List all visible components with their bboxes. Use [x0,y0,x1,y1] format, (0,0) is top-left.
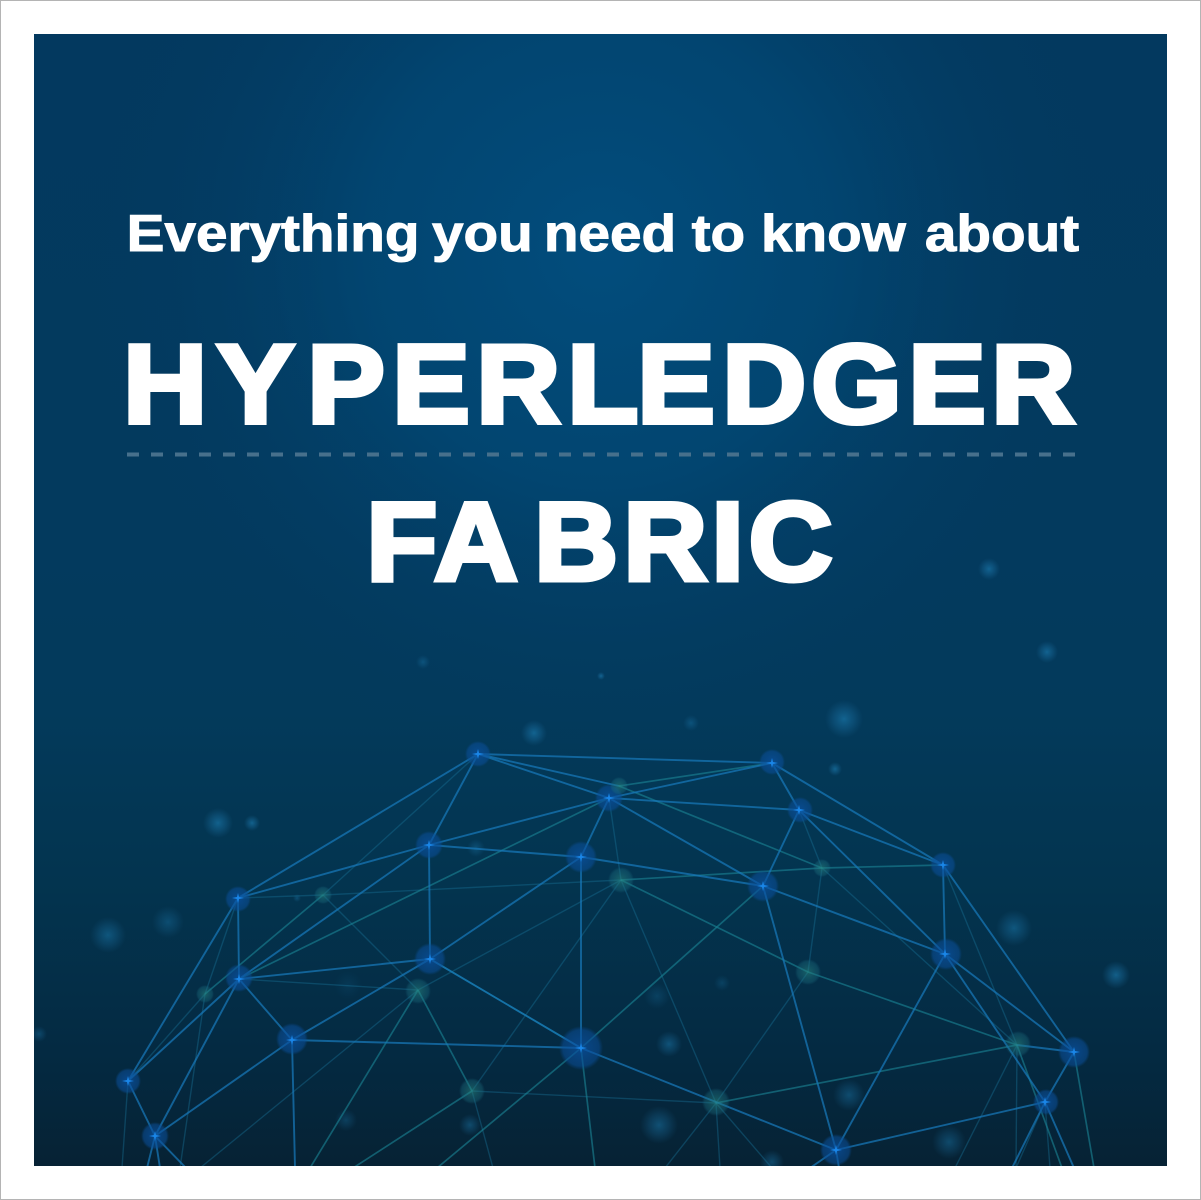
intro line: about [925,204,1079,262]
intro line: you [432,204,533,262]
network globe graphic [115,741,1094,1168]
teal connecting lines [205,763,1094,1168]
intro line: Everything [127,204,420,262]
intro line: need [544,204,676,262]
blue network nodes [115,741,1090,1166]
teal network nodes [196,777,1031,1116]
title: Hyperledger: HYPERLEDGER [123,323,1075,447]
faint connecting lines [122,754,1050,1168]
intro line: to [692,204,745,262]
title: Fabric: FABRIC [366,480,833,605]
intro line: know [761,204,907,262]
dashed divider [127,452,1075,456]
blue connecting lines [128,754,1074,1168]
floating glow particles [31,558,1130,1174]
